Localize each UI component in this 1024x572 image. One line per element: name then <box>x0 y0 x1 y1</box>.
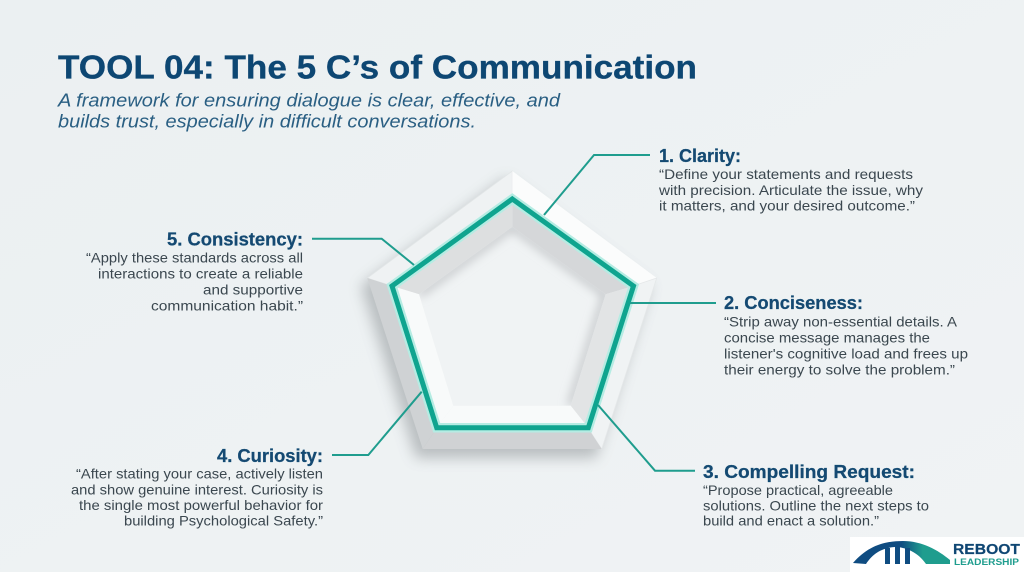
connector: conciseness <box>630 302 716 304</box>
connector: clarity <box>544 155 650 215</box>
callout: 3. Compelling Request: build and enact a solution.” <box>703 514 880 528</box>
callout: 2. Conciseness: “Strip away non-essential details. A <box>724 314 958 330</box>
callout: 1. Clarity: “Define your statements and requests <box>659 167 913 182</box>
callout: 4. Curiosity: the single most powerful behavior for <box>79 498 324 513</box>
subtitle: builds trust, especially in difficult conversations. <box>58 110 476 132</box>
callout: 5. Consistency: communication habit.” <box>151 298 304 314</box>
connector: curiosity <box>332 392 422 455</box>
callout: 5. Consistency: interactions to create a reliable <box>98 266 303 282</box>
callout: 4. Curiosity: “After stating your case, actively listen <box>76 466 323 482</box>
callout: 3. Compelling Request: “Propose practical, agreeable <box>703 483 893 498</box>
callout: 5. Consistency: and supportive <box>203 282 303 298</box>
callout: 1. Clarity: with precision. Articulate the issue, why <box>658 183 923 198</box>
callout: 3. Compelling Request: 3. Compelling Request: <box>703 462 915 482</box>
callout: 1. Clarity <box>658 146 923 214</box>
callout: 4. Curiosity: 4. Curiosity: <box>217 446 323 466</box>
callout: 1. Clarity: 1. Clarity: <box>659 146 741 166</box>
connector: compelling request <box>598 405 695 471</box>
callout: 3. Compelling Request <box>703 462 929 528</box>
callout: 4. Curiosity: building Psychological Safety.” <box>124 514 323 528</box>
title: TOOL 04: The 5 C’s of Communication <box>58 48 697 86</box>
callout: 2. Conciseness: 2. Conciseness: <box>724 293 863 313</box>
logo: Reboot Leadership <box>850 537 1024 572</box>
callout: 1. Clarity: it matters, and your desired outcome.” <box>659 198 916 214</box>
pentagon frame diagram <box>361 171 657 458</box>
subtitle: A framework for ensuring dialogue is clear, effective, and <box>57 90 561 110</box>
outer bevel faces <box>367 171 657 449</box>
icon: bridge <box>853 541 950 564</box>
callout: 2. Conciseness: listener's cognitive load and frees up <box>724 346 968 362</box>
callout: 3. Compelling Request: solutions. Outline the next steps to <box>703 498 929 514</box>
callout: 2. Conciseness <box>724 293 968 378</box>
callout: 4. Curiosity <box>71 446 324 528</box>
logo: Reboot Leadership: LEADERSHIP <box>954 557 1019 567</box>
inner floor and bevel faces <box>392 199 634 428</box>
subtitle <box>57 90 561 132</box>
callout: 5. Consistency <box>86 230 304 314</box>
callout: 5. Consistency: 5. Consistency: <box>167 230 303 250</box>
callout: 2. Conciseness: their energy to solve the problem.” <box>724 362 956 378</box>
callout: 4. Curiosity: and show genuine interest. Curiosity is <box>71 482 323 498</box>
connector: consistency <box>312 239 414 265</box>
callout: 2. Conciseness: concise message manages the <box>724 330 930 346</box>
teal ring <box>392 199 634 428</box>
callout: 5. Consistency: “Apply these standards across all <box>86 250 303 266</box>
logo: Reboot Leadership: REBOOT <box>953 542 1020 558</box>
